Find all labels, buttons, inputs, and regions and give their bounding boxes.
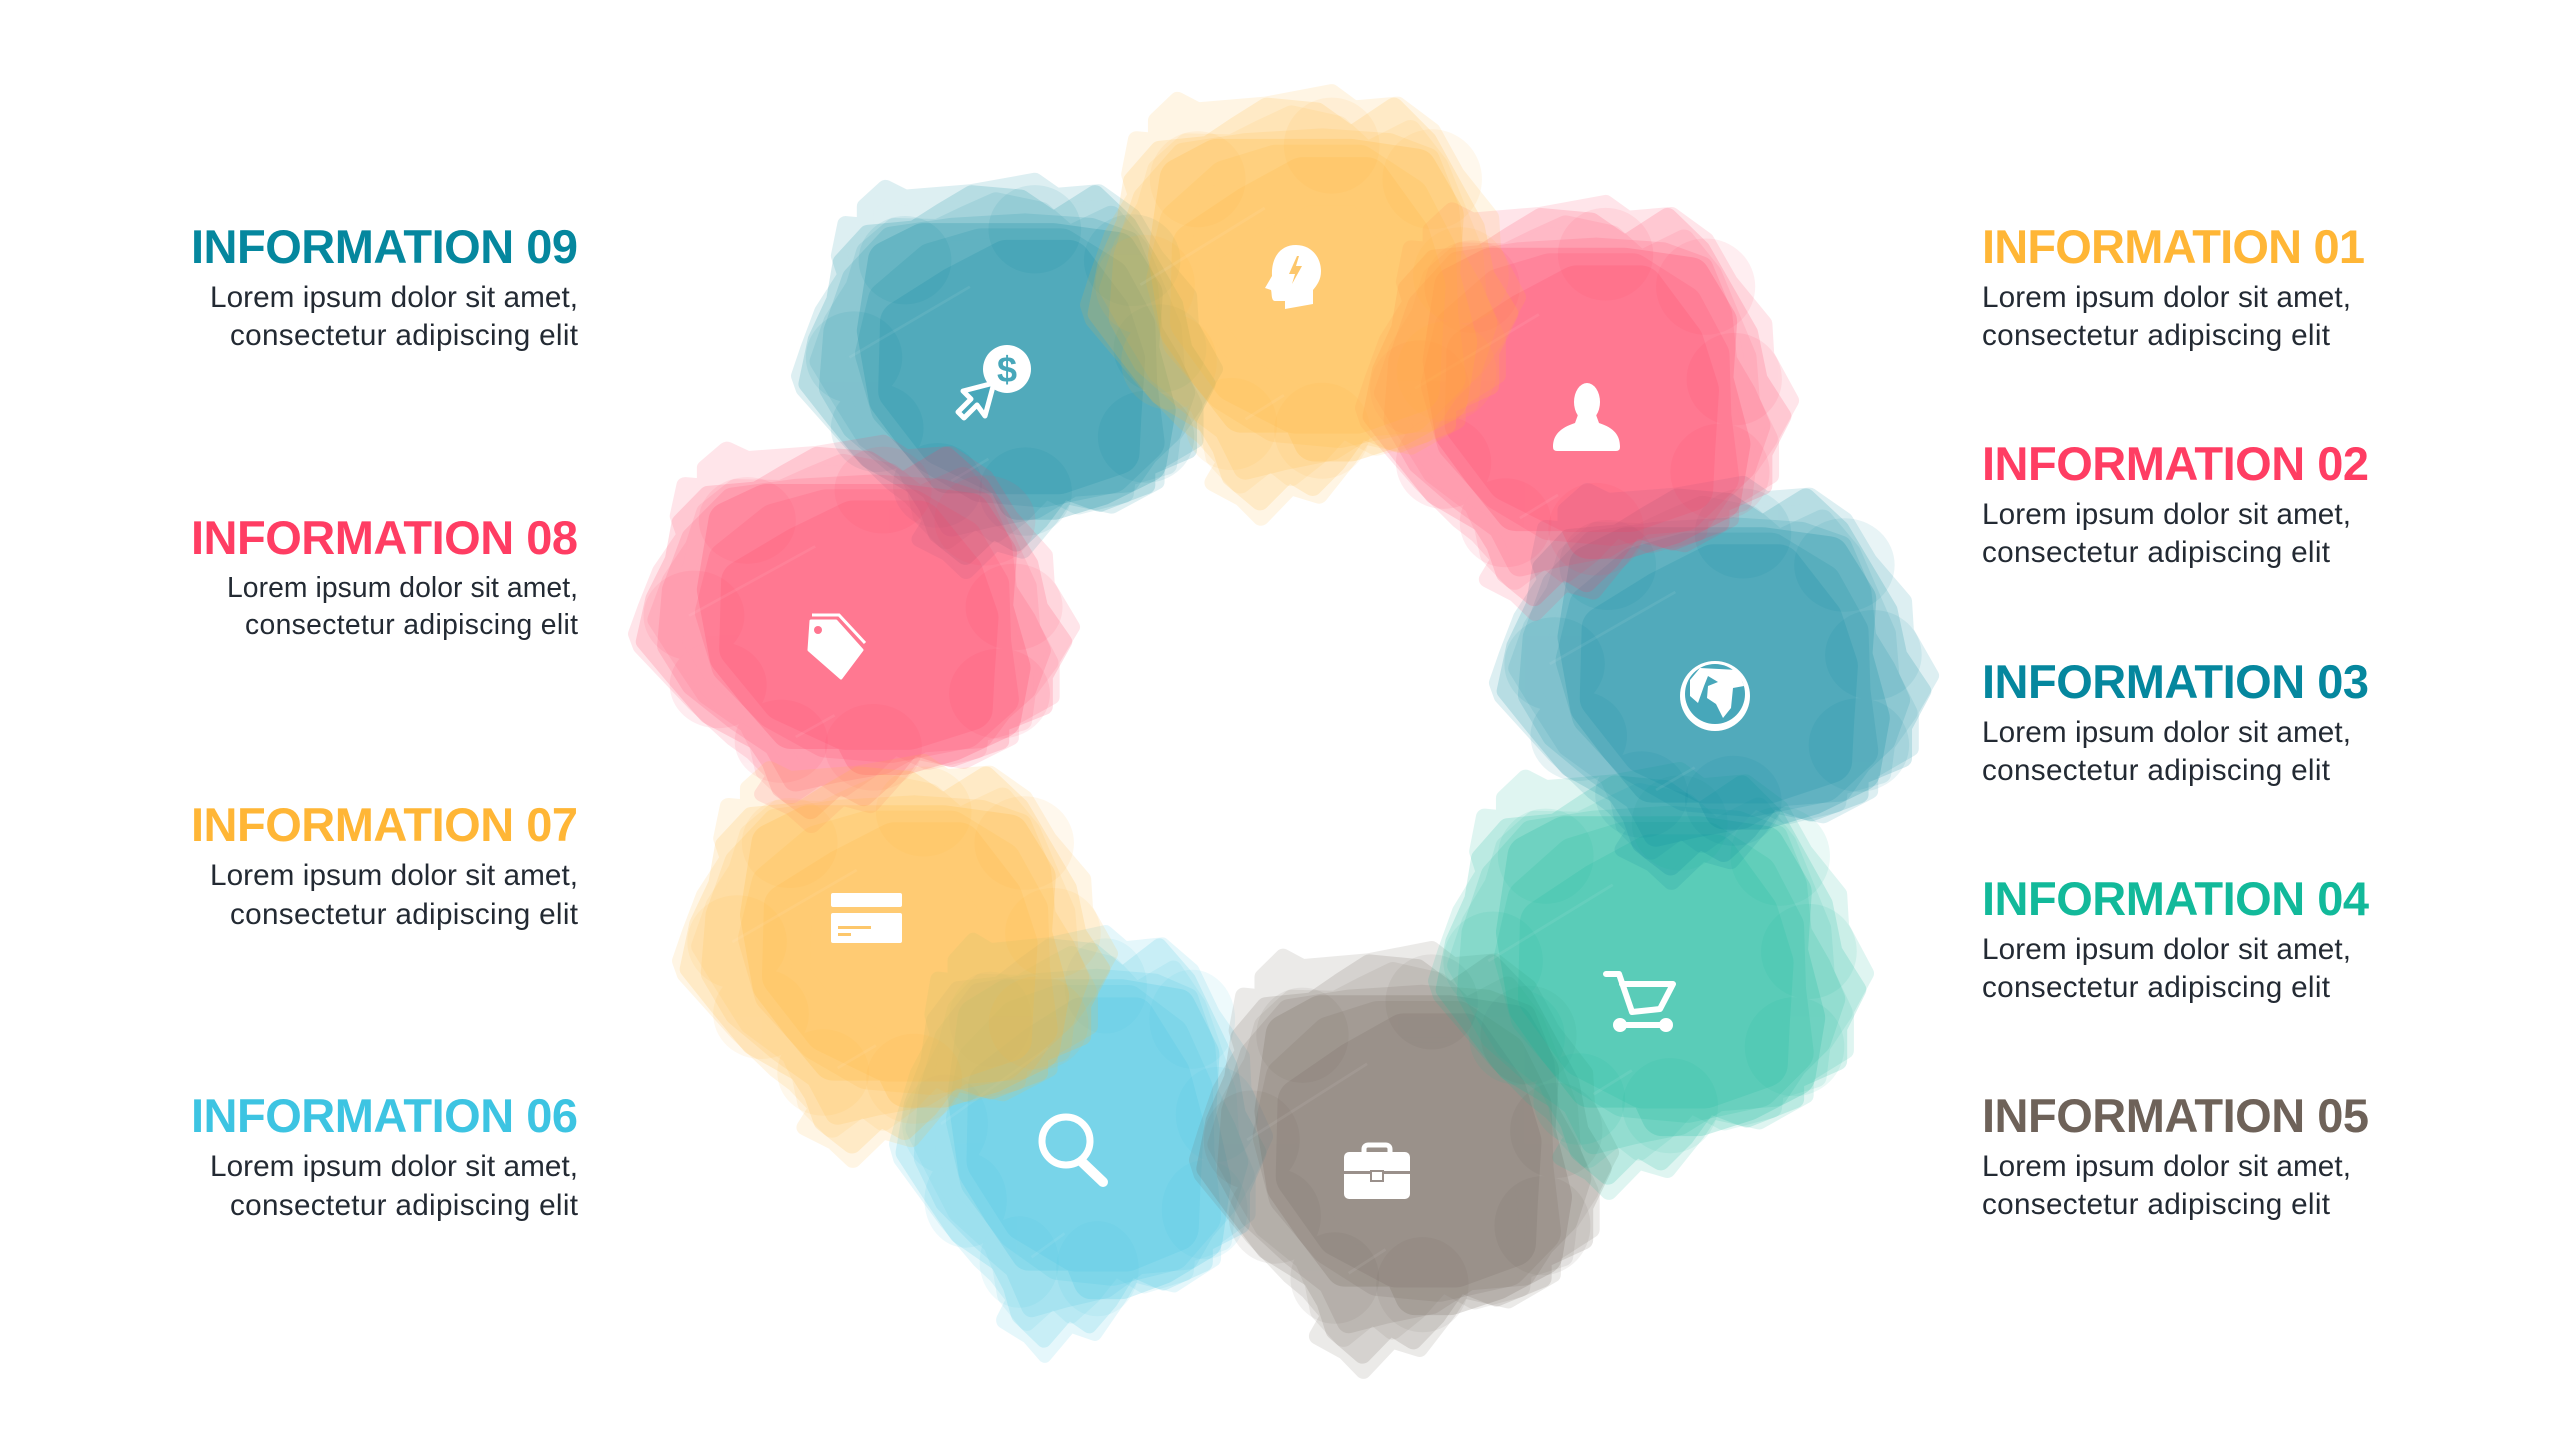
description 02: Lorem ipsum dolor sit amet, [1982, 498, 2351, 531]
description 03: Lorem ipsum dolor sit amet, [1982, 716, 2351, 749]
info block 04 [1982, 872, 2369, 1004]
description 09: Lorem ipsum dolor sit amet, [210, 281, 578, 314]
blob: information 06 blue [896, 934, 1266, 1354]
icon: card [831, 893, 902, 943]
icon: globe [1680, 661, 1750, 731]
heading 08: INFORMATION 08 [191, 511, 578, 564]
description 05: Lorem ipsum dolor sit amet, [1982, 1150, 2351, 1183]
info block 08 [191, 511, 578, 640]
icon: user silhouette [1553, 383, 1620, 451]
heading 07: INFORMATION 07 [191, 798, 578, 851]
description 09: consectetur adipiscing elit [230, 319, 579, 352]
blob: information 02 pink [1363, 203, 1791, 613]
description 02: consectetur adipiscing elit [1982, 536, 2331, 569]
description 08: Lorem ipsum dolor sit amet, [227, 571, 578, 603]
description 04: consectetur adipiscing elit [1982, 971, 2331, 1004]
icon: briefcase [1344, 1145, 1410, 1199]
description 06: consectetur adipiscing elit [230, 1189, 579, 1222]
info block 01 [1982, 220, 2365, 352]
heading 09: INFORMATION 09 [191, 220, 578, 273]
description 07: Lorem ipsum dolor sit amet, [210, 859, 578, 892]
description 03: consectetur adipiscing elit [1982, 754, 2331, 787]
heading 04: INFORMATION 04 [1982, 872, 2369, 925]
info block 05 [1982, 1089, 2369, 1221]
blob: information 08 pink [637, 442, 1071, 825]
blob: information 03 teal [1498, 484, 1930, 882]
blob: information 05 brown [1197, 950, 1611, 1370]
info block 07 [191, 798, 579, 931]
description 01: Lorem ipsum dolor sit amet, [1982, 281, 2351, 314]
icon: cursor clicking a dollar coin: $ [997, 349, 1017, 390]
icon: magnifying glass [1042, 1117, 1103, 1182]
description 06: Lorem ipsum dolor sit amet, [210, 1150, 578, 1183]
heading 01: INFORMATION 01 [1982, 220, 2365, 273]
blob: information 01 orange [1089, 93, 1517, 517]
icon: price tag [809, 615, 865, 678]
description 05: consectetur adipiscing elit [1982, 1188, 2331, 1221]
description 07: consectetur adipiscing elit [230, 898, 579, 931]
heading 02: INFORMATION 02 [1982, 437, 2369, 490]
info block 06 [191, 1089, 579, 1222]
info block 02 [1982, 437, 2369, 569]
icon: shopping cart [1606, 974, 1673, 1029]
description 01: consectetur adipiscing elit [1982, 319, 2331, 352]
description 08: consectetur adipiscing elit [245, 608, 578, 640]
blob: information 09 teal [799, 181, 1215, 571]
description 04: Lorem ipsum dolor sit amet, [1982, 933, 2351, 966]
blob: information 07 orange [681, 762, 1109, 1160]
blob ring [637, 93, 1930, 1370]
heading 05: INFORMATION 05 [1982, 1089, 2369, 1142]
icon: head with lightning bolt [1265, 245, 1321, 309]
icon: cursor clicking a dollar coin [958, 345, 1031, 418]
heading 03: INFORMATION 03 [1982, 655, 2369, 708]
info block 03 [1982, 655, 2369, 787]
info block 09 [191, 220, 579, 352]
blob: information 04 green [1437, 771, 1865, 1191]
heading 06: INFORMATION 06 [191, 1089, 578, 1142]
